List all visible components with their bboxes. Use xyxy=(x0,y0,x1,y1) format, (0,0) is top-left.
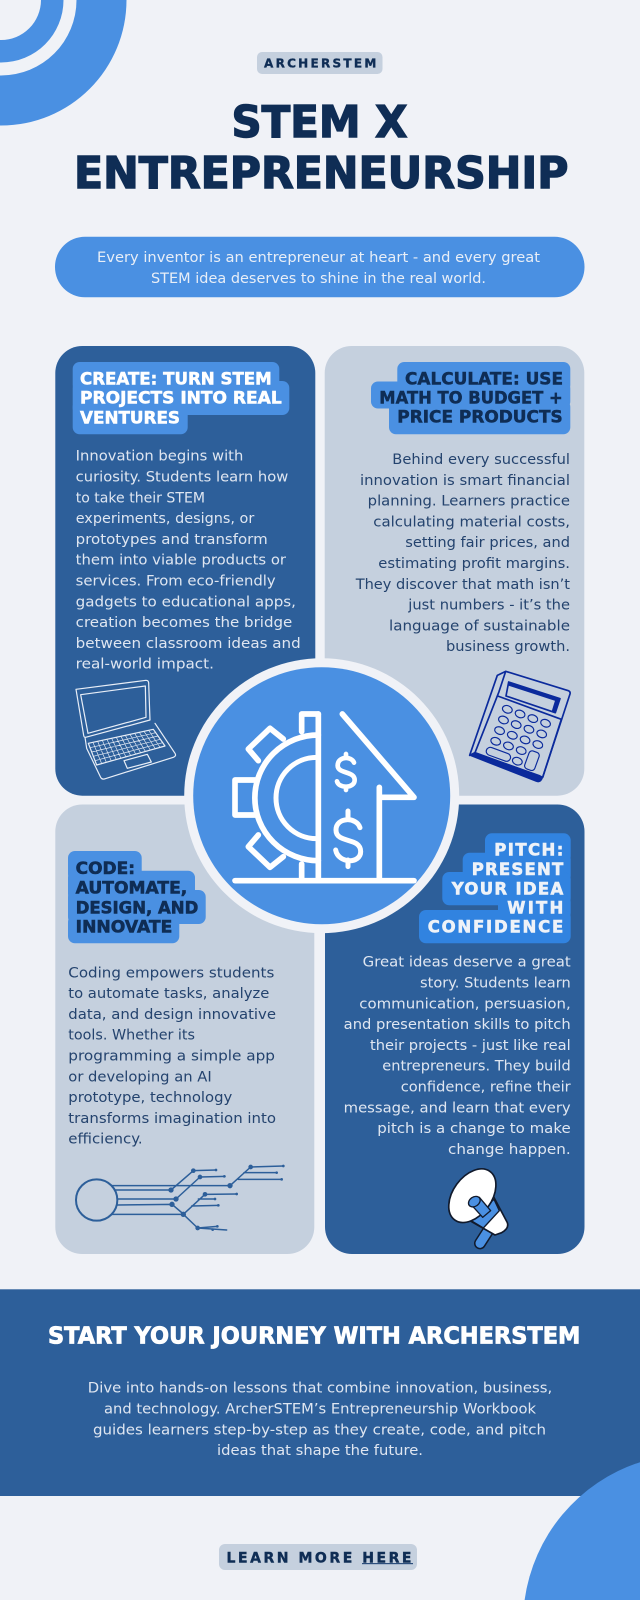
calculate body text: calculating material costs, xyxy=(373,513,570,530)
pitch heading: PRESENT xyxy=(472,860,564,879)
create heading xyxy=(73,362,289,434)
icon: gear and rising arrow with dollar signs xyxy=(235,714,414,881)
calculate heading: CALCULATE: USE xyxy=(405,369,563,388)
calculate body text: language of sustainable xyxy=(389,617,570,634)
calculate body text: just numbers - it’s the xyxy=(407,597,570,614)
icon: calculator xyxy=(470,671,570,782)
code body text: or developing an AI xyxy=(68,1068,212,1085)
intro pill: Every inventor is an entrepreneur at heart - and every great xyxy=(97,249,540,266)
create body text: curiosity. Students learn how xyxy=(76,468,288,486)
create body text: services. From eco-friendly xyxy=(76,572,276,590)
code heading: AUTOMATE, xyxy=(76,878,187,897)
code body text: data, and design innovative xyxy=(68,1006,276,1023)
intro pill: STEM idea deserves to shine in the real world. xyxy=(151,270,486,287)
icon: circuit xyxy=(76,1165,285,1231)
code body text: efficiency. xyxy=(68,1131,143,1148)
pitch heading: YOUR IDEA xyxy=(451,879,564,898)
band body text xyxy=(88,1380,552,1459)
code body text: prototype, technology xyxy=(68,1089,233,1106)
create body text: Innovation begins with xyxy=(76,448,243,465)
code heading xyxy=(68,851,206,943)
band body text: ideas that shape the future. xyxy=(217,1442,423,1459)
pitch body text: Great ideas deserve a great xyxy=(363,954,571,971)
calculate body text: business growth. xyxy=(446,638,570,655)
calculate body text: setting fair prices, and xyxy=(405,534,570,551)
call-to-action band xyxy=(0,1289,640,1496)
calculate heading: PRICE PRODUCTS xyxy=(397,408,563,427)
pitch body text: entrepreneurs. They build xyxy=(382,1058,571,1075)
code heading: INNOVATE xyxy=(76,918,172,937)
band body text: and technology. ArcherSTEM’s Entrepreneurship Workbook xyxy=(104,1400,537,1418)
code body text: Coding empowers students xyxy=(68,964,274,981)
code body text: programming a simple app xyxy=(68,1048,275,1064)
pitch heading: PITCH: xyxy=(494,841,563,860)
intro pill xyxy=(55,237,584,297)
calculate body text: Behind every successful xyxy=(392,451,570,468)
icon: megaphone xyxy=(439,1160,508,1243)
learn more button: LEARN MORE HERE xyxy=(226,1550,412,1566)
learn more button xyxy=(219,1544,417,1570)
calculate heading: MATH TO BUDGET + xyxy=(379,388,563,407)
pitch body text: pitch is a change to make xyxy=(377,1120,571,1137)
band body text: guides learners step-by-step as they create, code, and pitch xyxy=(93,1421,546,1438)
panel: calculate xyxy=(325,346,584,796)
title: STEM X xyxy=(232,97,408,148)
pitch heading: WITH xyxy=(507,898,563,917)
create heading: VENTURES xyxy=(80,408,180,427)
central emblem xyxy=(184,658,459,933)
create body text: prototypes and transform xyxy=(76,531,268,548)
create body text: to take their STEM xyxy=(76,489,205,506)
pitch body text: message, and learn that every xyxy=(344,1099,571,1116)
pitch body text: change happen. xyxy=(448,1141,571,1158)
panel: code xyxy=(55,804,314,1254)
decorative circle bottom right xyxy=(525,1462,640,1600)
calculate heading xyxy=(371,362,570,434)
calculate body text: innovation is smart financial xyxy=(360,472,570,489)
panel: create xyxy=(55,346,315,796)
create body text: experiments, designs, or xyxy=(76,510,254,527)
code heading: CODE: xyxy=(76,859,135,878)
calculate body text: planning. Learners practice xyxy=(368,493,570,510)
calculate body text xyxy=(355,451,570,655)
decorative concentric circle top left xyxy=(0,0,126,126)
title xyxy=(74,97,568,199)
create heading: CREATE: TURN STEM xyxy=(80,369,272,388)
pitch body text: and presentation skills to pitch xyxy=(344,1016,571,1033)
band body text: Dive into hands-on lessons that combine innovation, business, xyxy=(88,1380,552,1397)
code heading: DESIGN, AND xyxy=(76,898,198,917)
create body text: them into viable products or xyxy=(76,552,286,569)
code body text: tools. Whether its xyxy=(68,1027,195,1044)
pitch body text: communication, persuasion, xyxy=(359,995,571,1012)
pitch body text: confidence, refine their xyxy=(401,1078,571,1096)
create body text: gadgets to educational apps, xyxy=(76,593,296,610)
code body text xyxy=(68,964,276,1148)
pitch body text: their projects - just like real xyxy=(370,1037,571,1054)
create heading: PROJECTS INTO REAL xyxy=(80,388,282,407)
brand badge xyxy=(257,52,382,74)
create body text: between classroom ideas and xyxy=(76,635,301,652)
calculate body text: estimating profit margins. xyxy=(378,555,570,572)
calculate body text: They discover that math isn’t xyxy=(355,576,570,593)
create body text xyxy=(76,448,301,673)
band heading: START YOUR JOURNEY WITH ARCHERSTEM xyxy=(48,1323,580,1349)
create body text: real-world impact. xyxy=(76,656,214,673)
pitch body text: story. Students learn xyxy=(420,974,571,992)
pitch body text xyxy=(344,954,571,1158)
create body text: creation becomes the bridge xyxy=(76,614,292,631)
code body text: transforms imagination into xyxy=(68,1110,276,1127)
icon: laptop xyxy=(76,680,176,779)
panel: pitch xyxy=(325,804,584,1254)
pitch heading xyxy=(419,833,571,943)
title: ENTREPRENEURSHIP xyxy=(74,148,568,199)
code body text: to automate tasks, analyze xyxy=(68,985,269,1002)
brand badge: ARCHERSTEM xyxy=(264,56,376,70)
pitch heading: CONFIDENCE xyxy=(428,918,563,937)
